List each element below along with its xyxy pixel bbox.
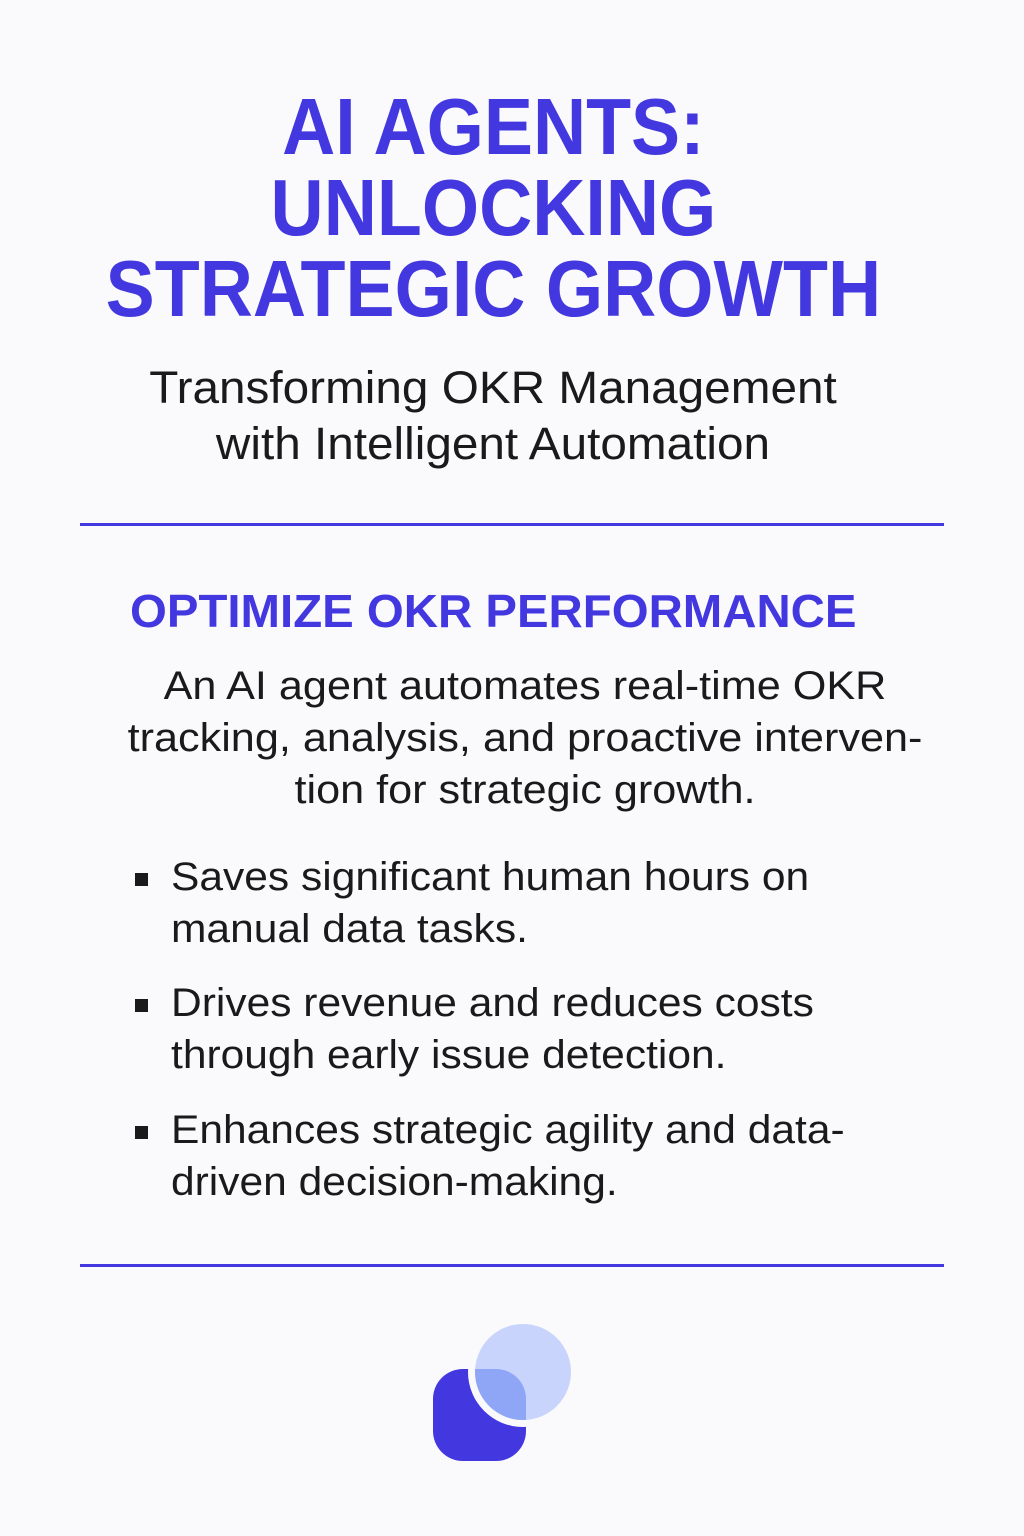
bullet 2 — [135, 981, 814, 1077]
title: AI AGENTS: — [282, 82, 705, 171]
bullet 2: through early issue detection. — [171, 1033, 726, 1077]
section heading: OPTIMIZE OKR PERFORMANCE — [130, 585, 857, 637]
description paragraph: An AI agent automates real-time OKR — [164, 664, 886, 708]
icon: logo — [433, 1324, 571, 1461]
bullet 3: Enhances strategic agility and data- — [171, 1108, 845, 1152]
description paragraph — [128, 664, 922, 812]
title: STRATEGIC GROWTH — [106, 244, 881, 333]
title: UNLOCKING — [271, 163, 716, 252]
bullet 1 — [135, 855, 809, 951]
subtitle: with Intelligent Automation — [216, 418, 770, 469]
bullet 2: Drives revenue and reduces costs — [171, 981, 814, 1025]
description paragraph: tion for strategic growth. — [294, 768, 755, 812]
subtitle — [149, 362, 837, 469]
subtitle: Transforming OKR Management — [149, 362, 837, 413]
bullet 1: Saves significant human hours on — [171, 855, 809, 899]
title — [106, 82, 881, 333]
description paragraph: tracking, analysis, and proactive interven- — [128, 716, 922, 760]
bullet 3 — [135, 1108, 845, 1204]
bullet 3: driven decision-making. — [171, 1160, 618, 1204]
bullet 1: manual data tasks. — [171, 907, 528, 951]
